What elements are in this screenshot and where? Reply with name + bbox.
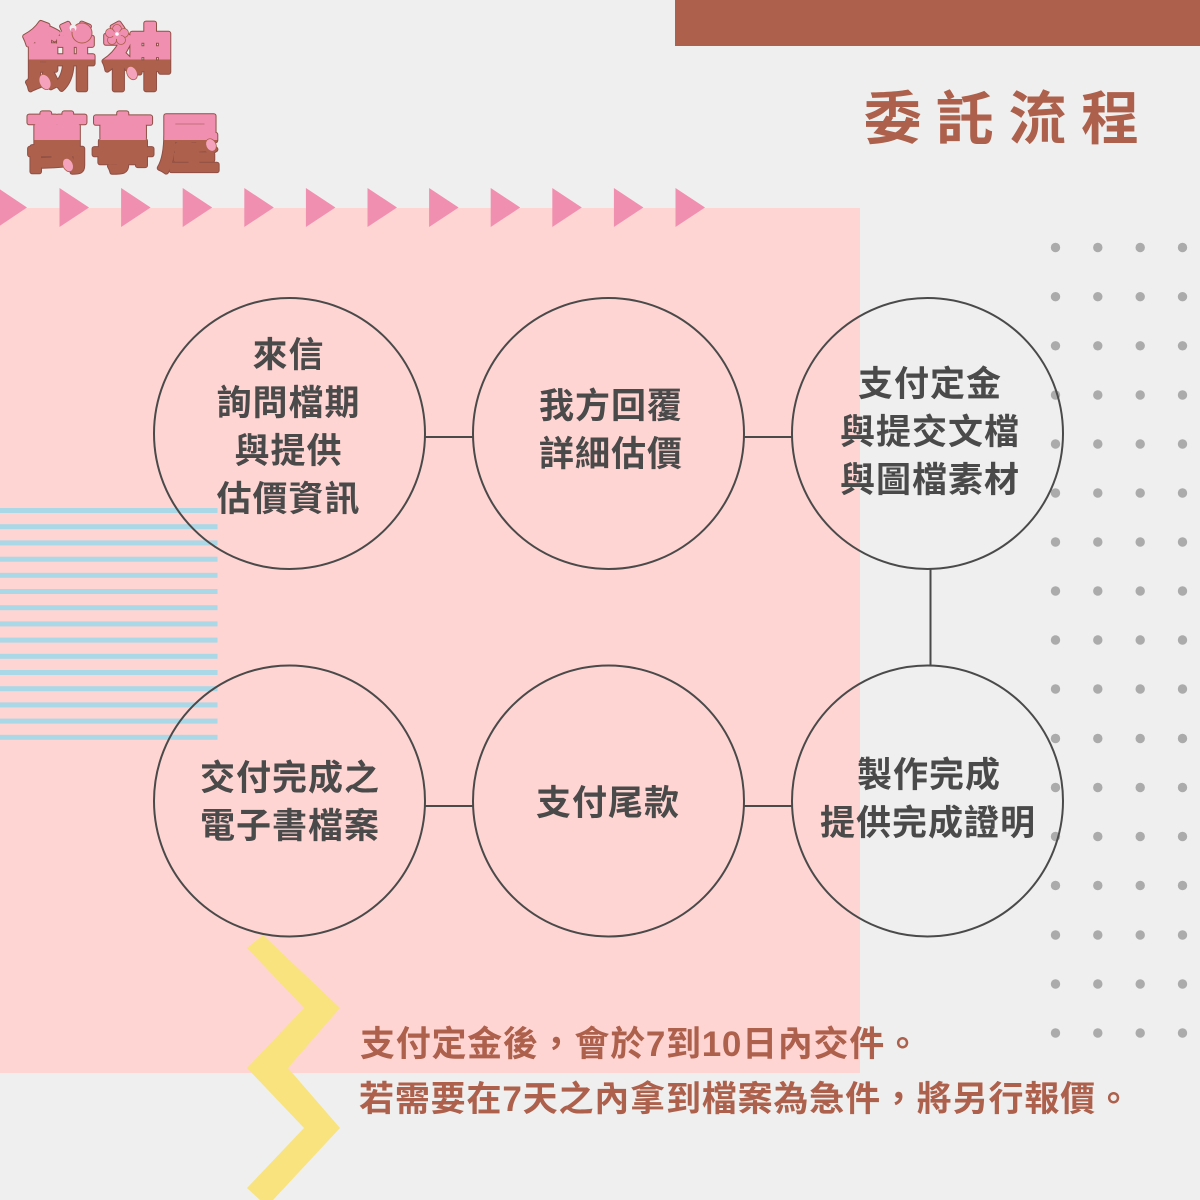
footnote xyxy=(359,1025,1131,1119)
icon: blossom xyxy=(106,24,128,44)
node 1: 來信 xyxy=(252,336,325,375)
node 4 xyxy=(792,666,1063,936)
node 5 xyxy=(473,666,744,936)
node 2: 我方回覆 xyxy=(539,387,683,426)
node 4: 製作完成 xyxy=(857,756,1001,795)
logo xyxy=(24,3,224,184)
node 6: 電子書檔案 xyxy=(200,807,380,846)
node 3 xyxy=(792,298,1063,569)
node 4: 提供完成證明 xyxy=(820,804,1036,843)
node 3: 與提交文檔 xyxy=(840,413,1020,452)
pink triangle row xyxy=(0,188,705,227)
blue stripes xyxy=(0,508,218,740)
yellow zigzag xyxy=(247,935,340,1200)
panel: pink background xyxy=(0,208,860,1073)
logo line 1: 餅神 xyxy=(24,3,181,104)
logo line 2: 萬事屋 xyxy=(26,94,224,184)
connector lines xyxy=(425,437,930,806)
node 1: 詢問檔期 xyxy=(216,384,361,423)
title: 委託流程 xyxy=(864,87,1154,152)
node 1: 估價資訊 xyxy=(216,480,361,519)
dot grid xyxy=(1051,243,1187,1038)
logo line 2: 萬事屋 xyxy=(26,94,224,184)
top brown bar xyxy=(675,0,1200,46)
footnote: 若需要在7天之內拿到檔案為急件，將另行報價。 xyxy=(359,1079,1131,1119)
node 1 xyxy=(154,298,425,569)
footnote: 支付定金後，會於7到10日內交件。 xyxy=(360,1025,920,1064)
icon: petals xyxy=(37,65,218,173)
icon: cookie xyxy=(60,23,92,43)
node 2: 詳細估價 xyxy=(539,435,683,474)
node 2 xyxy=(473,298,744,569)
node 5: 支付尾款 xyxy=(536,784,680,823)
node 3: 與圖檔素材 xyxy=(840,461,1020,500)
node 6: 交付完成之 xyxy=(200,759,380,798)
node 1: 與提供 xyxy=(234,432,343,471)
node 3: 支付定金 xyxy=(858,365,1002,404)
logo line 1: 餅神 xyxy=(24,3,181,104)
node 6 xyxy=(154,666,425,936)
